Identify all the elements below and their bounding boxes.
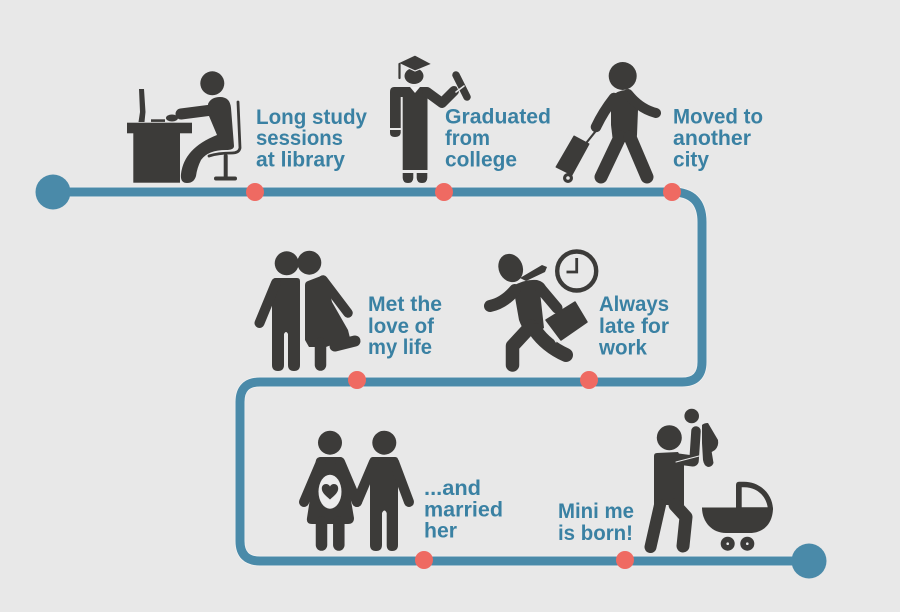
icon: person studying at desk — [127, 71, 240, 183]
icon: kissing couple — [260, 251, 355, 371]
label: and married her: her — [424, 520, 457, 542]
icon: graduate with diploma — [390, 55, 467, 183]
milestone: late for work — [490, 250, 669, 389]
label: moved to another city — [673, 106, 763, 172]
timeline track — [36, 174, 826, 578]
label: always late for work: late for — [599, 315, 669, 338]
label: mini me is born — [558, 500, 634, 545]
label: long study sessions — [256, 106, 367, 172]
icon: father lifting baby with pram — [650, 409, 773, 551]
label: moved to another city: Moved to — [673, 106, 763, 128]
label: long study sessions: sessions — [256, 127, 343, 150]
marker dot — [580, 371, 598, 389]
heart — [322, 484, 338, 500]
label: and married her — [424, 477, 503, 542]
label: and married her: married — [424, 498, 503, 522]
label: met the love of my life: my life — [368, 336, 432, 359]
milestone: love — [260, 251, 442, 389]
end node — [792, 544, 826, 578]
label: met the love of my life: Met the — [368, 293, 442, 316]
label: graduated from college: Graduated — [445, 106, 551, 128]
label: moved to another city: another — [673, 127, 751, 150]
start node — [36, 174, 70, 210]
marker dot — [616, 551, 634, 569]
label: met the love of my life — [368, 293, 442, 359]
marker dot — [348, 371, 366, 389]
label: and married her: ...and — [424, 477, 481, 500]
label: graduated from college: from — [445, 127, 490, 150]
clock — [557, 252, 596, 290]
label: long study sessions: at library — [256, 148, 345, 172]
label: moved to another city: city — [673, 148, 709, 172]
baby — [684, 409, 718, 467]
label: always late for work — [598, 293, 669, 360]
label: mini me is born: is born! — [558, 522, 633, 545]
icon: pregnant wife and husband holding hands — [304, 431, 409, 551]
label: long study sessions: Long study — [256, 106, 367, 129]
marker dot — [246, 183, 264, 201]
milestone: married — [304, 431, 503, 569]
marker dot — [435, 183, 453, 201]
icon: running man with clock and briefcase — [490, 250, 596, 365]
milestone: baby — [558, 409, 773, 569]
milestone: moving — [556, 62, 763, 201]
label: mini me is born: Mini me — [558, 500, 634, 523]
icon: walker with suitcase — [556, 62, 656, 183]
marker dot — [415, 551, 433, 569]
pram — [702, 482, 773, 551]
label: graduated from college: college — [445, 148, 517, 172]
milestone: graduation — [390, 55, 551, 201]
label: met the love of my life: love of — [368, 315, 434, 338]
label: graduated from college — [445, 106, 551, 172]
milestone: study — [127, 71, 367, 201]
label: always late for work: Always — [599, 293, 669, 316]
label: always late for work: work — [598, 336, 647, 360]
marker dot — [663, 183, 681, 201]
